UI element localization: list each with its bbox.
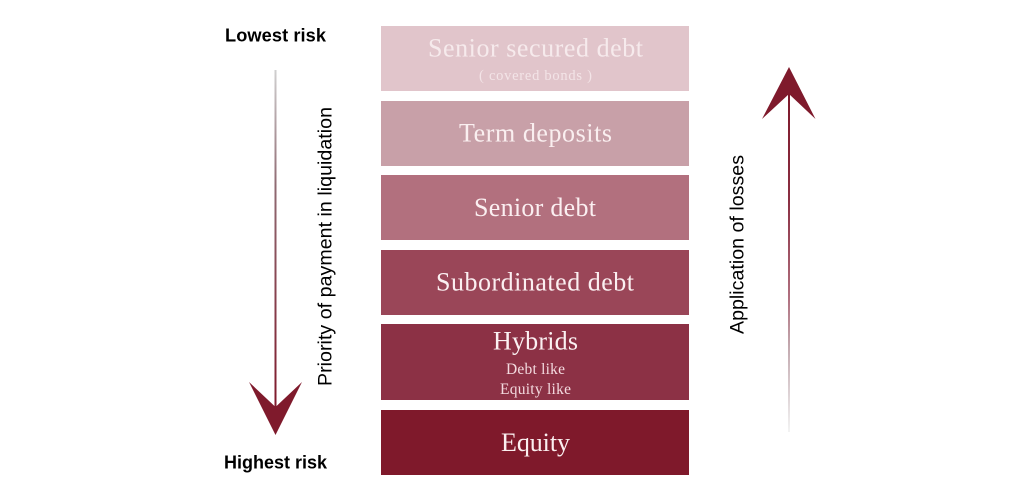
tier: subordinated debt: Subordinated debt (436, 268, 635, 296)
tier: equity (381, 410, 689, 475)
tier: hybrids: Equity like (500, 381, 571, 398)
tier: hybrids: Hybrids (493, 326, 578, 356)
label: highest risk: Highest risk (224, 452, 328, 472)
tier: hybrids: Debt like (506, 361, 565, 378)
tier: senior debt (381, 175, 689, 240)
axis label: application of losses: Application of losses (726, 155, 748, 334)
arrow: application of losses, pointing up (762, 67, 816, 432)
tier: subordinated debt (381, 250, 689, 315)
axis label: priority of payment in liquidation: Priority of payment in liquidation (314, 107, 336, 386)
label: lowest risk: Lowest risk (225, 26, 327, 46)
tier: hybrids (381, 324, 689, 400)
tier: senior secured debt (381, 26, 689, 91)
tier: senior debt: Senior debt (474, 193, 597, 222)
tier: term deposits: Term deposits (459, 118, 612, 148)
arrow: priority of payment, pointing down (249, 70, 302, 435)
tier: term deposits (381, 101, 689, 166)
tier: equity: Equity (501, 428, 570, 457)
tier: senior secured debt: ( covered bonds ) (479, 68, 592, 84)
stack of debt tiers (381, 26, 689, 475)
tier: senior secured debt: Senior secured debt (428, 34, 644, 62)
